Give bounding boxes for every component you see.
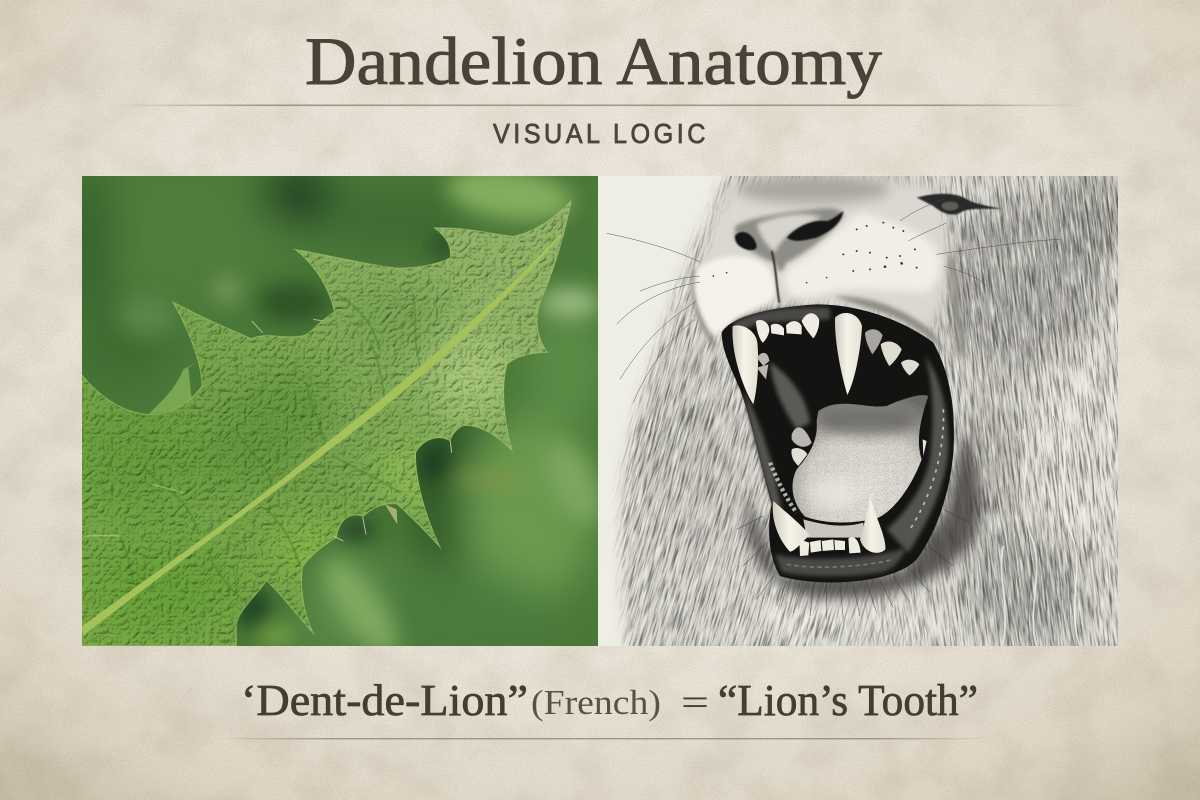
caption: equals sign: =: [681, 682, 709, 724]
subtitle: VISUAL LOGIC: [493, 118, 705, 149]
lower incisors: [799, 537, 861, 556]
nose: [735, 208, 843, 303]
panel: dandelion leaf photo: [82, 176, 598, 646]
upper fang right: [835, 313, 862, 395]
upper incisors: [756, 313, 819, 343]
right inner lip band: [887, 356, 948, 553]
title: Dandelion Anatomy: [305, 23, 882, 99]
upper fang left: [732, 325, 758, 404]
upper lip shadow: [833, 296, 953, 363]
cheek contour shading: [950, 256, 962, 356]
open mouth: [722, 304, 954, 582]
whisker spots: [712, 222, 918, 284]
palate folds: [770, 363, 810, 429]
lower fang right: [860, 496, 885, 553]
radiating chin hairs: [737, 509, 970, 619]
face and forehead: [693, 175, 962, 363]
small back lobe: [148, 362, 197, 414]
upper gum: [733, 307, 830, 333]
lower fang left: [773, 501, 809, 552]
midrib: [82, 234, 562, 635]
mane: [597, 173, 1140, 653]
eye: [917, 194, 1003, 215]
lower lip: [775, 548, 907, 576]
blurred green background: [67, 161, 610, 664]
caption: language note: (French): [531, 683, 661, 722]
lower gum line: [803, 519, 863, 538]
caption: English meaning: “Lion’s Tooth”: [718, 676, 978, 725]
leaf blade: [82, 200, 572, 646]
tongue: [792, 395, 928, 522]
wavy mane locks: [1001, 409, 1080, 646]
whiskers: [607, 199, 1060, 403]
right upper teeth: [865, 329, 919, 375]
lower left teeth row: [770, 463, 797, 513]
caption: French term: ‘Dent-de-Lion”: [241, 676, 528, 725]
panel: lion illustration: [598, 176, 1118, 646]
spines: [252, 319, 452, 541]
edge highlight: [80, 199, 572, 646]
dark ruff around jaw: [745, 429, 980, 599]
white muzzle patches: [695, 256, 775, 336]
left inner molars: [757, 353, 927, 466]
veins: [120, 293, 420, 603]
